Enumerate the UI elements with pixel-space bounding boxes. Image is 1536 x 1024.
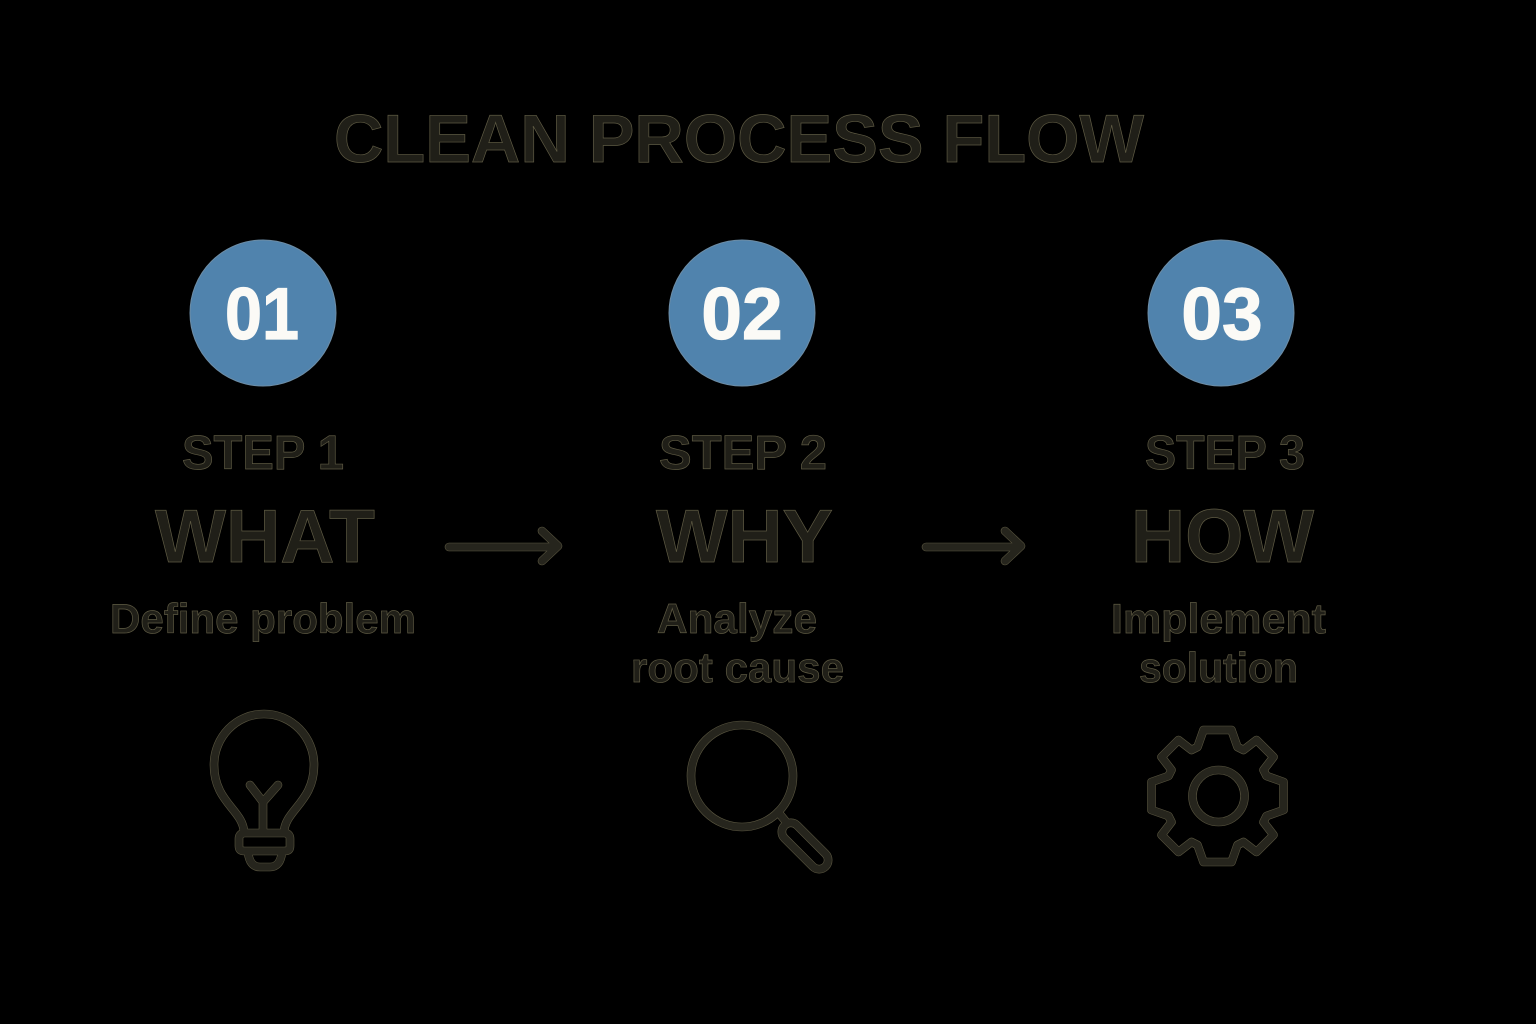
- step 3 description: Implement: [1111, 595, 1326, 642]
- step 3 label: STEP 3: [1145, 427, 1305, 480]
- number badge 02: 02: [701, 274, 783, 355]
- icon: magnifying glass: [691, 725, 832, 873]
- step 2 description: root cause: [631, 644, 844, 691]
- step 3 column: [1111, 240, 1326, 862]
- step 3 description: solution: [1139, 644, 1298, 691]
- arrow: step 2 to step 3: [926, 531, 1021, 561]
- icon: gear: [1152, 730, 1284, 862]
- arrow: step 1 to step 2: [449, 531, 558, 561]
- number badge 01: 01: [225, 274, 299, 355]
- step 3 description: [1111, 595, 1326, 691]
- step 2 heading: WHY: [656, 494, 833, 578]
- number badge 02: [669, 240, 815, 386]
- step 1 description: Define problem: [110, 595, 416, 642]
- step 1 column: [110, 240, 416, 867]
- step 2 label: STEP 2: [659, 427, 827, 480]
- number badge 03: 03: [1181, 274, 1263, 355]
- step 2 description: Analyze: [657, 595, 817, 642]
- number badge 01: [190, 240, 336, 386]
- step 1 heading: WHAT: [155, 494, 375, 578]
- step 1 label: STEP 1: [182, 427, 344, 480]
- icon: light bulb: [214, 714, 314, 867]
- title: CLEAN PROCESS FLOW: [334, 101, 1145, 177]
- step 2 description: [631, 595, 844, 691]
- step 2 column: [631, 240, 844, 873]
- step 3 heading: HOW: [1131, 494, 1314, 578]
- number badge 03: [1148, 240, 1294, 386]
